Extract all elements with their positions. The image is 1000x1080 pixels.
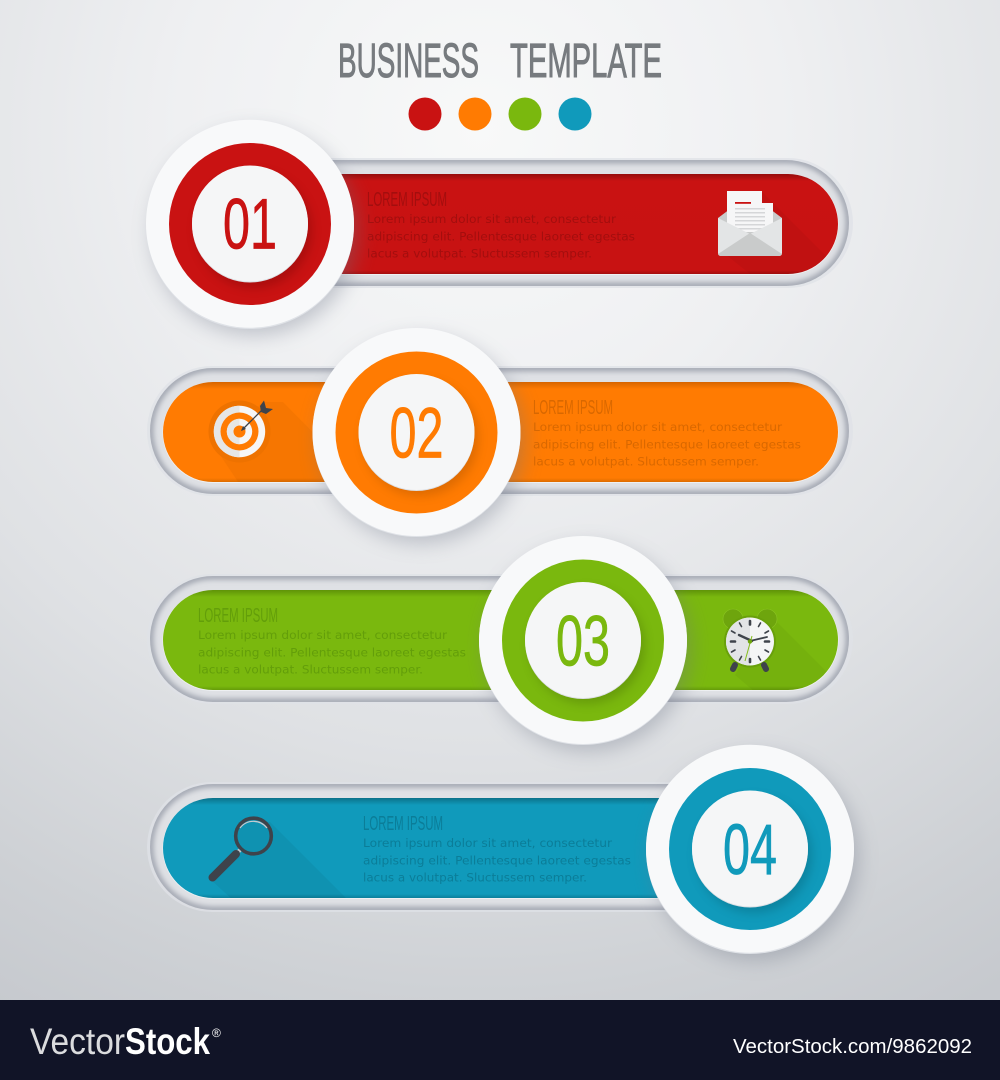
- title: TEMPLATE: [510, 35, 662, 88]
- step 1 text: Lorem ipsum dolor sit amet, consectetur: [367, 212, 616, 226]
- footer logo: [30, 1021, 221, 1062]
- step 2 text: Lorem ipsum dolor sit amet, consectetur: [533, 420, 782, 434]
- step 2 text: [533, 397, 801, 468]
- step 1 text: [367, 189, 635, 260]
- panel: step 1: [146, 120, 860, 335]
- step 4 text: Lorem ipsum dolor sit amet, consectetur: [363, 836, 612, 850]
- step 3 bar: [163, 590, 838, 690]
- panel: step 4: [147, 745, 858, 960]
- step 1 bar: [163, 174, 838, 274]
- title: BUSINESS: [338, 35, 479, 88]
- step 3 text: Lorem ipsum dolor sit amet, consectetur: [198, 628, 447, 642]
- step 2 text: LOREM IPSUM: [533, 397, 613, 419]
- icon: target with arrow: [208, 400, 273, 462]
- footer logo: Stock: [125, 1021, 210, 1062]
- step 2 text: lacus a volutpat. Sluctussem semper.: [533, 454, 759, 468]
- step 4 text: adipiscing elit. Pellentesque laoreet egestas: [363, 854, 631, 868]
- step 1 text: adipiscing elit. Pellentesque laoreet egestas: [367, 230, 635, 244]
- step 4 text: LOREM IPSUM: [363, 813, 443, 835]
- footer band: [0, 1000, 1000, 1080]
- step 3 badge: 03: [556, 602, 610, 682]
- step 1 badge: 01: [223, 186, 277, 264]
- panel: step 3: [147, 536, 860, 751]
- step 2 badge: 02: [390, 394, 444, 474]
- icon: magnifying glass: [212, 818, 271, 878]
- footer logo: Vector: [30, 1021, 125, 1062]
- step 2 badge: [312, 328, 524, 543]
- step 2 bar: [163, 382, 838, 482]
- icon: alarm clock: [723, 609, 777, 669]
- step 4 badge: 04: [723, 811, 777, 890]
- step 4 bar: [163, 798, 838, 898]
- icon: magnifier long shadow: [213, 822, 345, 898]
- step 4 text: lacus a volutpat. Sluctussem semper.: [363, 870, 587, 884]
- icon: envelope long shadow: [720, 192, 860, 290]
- colour dots: [408, 98, 592, 130]
- step 3 text: lacus a volutpat. Sluctussem semper.: [198, 662, 423, 676]
- icon: target long shadow: [222, 402, 320, 482]
- step 3 badge: [479, 536, 691, 751]
- panel: step 2: [147, 328, 853, 543]
- step 1 text: LOREM IPSUM: [367, 189, 447, 211]
- icon: envelope with letter: [718, 191, 782, 256]
- step 3 text: LOREM IPSUM: [198, 605, 278, 627]
- step 1 badge: [146, 120, 358, 335]
- step 3 text: [198, 605, 466, 676]
- footer logo: ®: [212, 1026, 221, 1040]
- step 3 text: adipiscing elit. Pellentesque laoreet egestas: [198, 646, 466, 660]
- step 1 text: lacus a volutpat. Sluctussem semper.: [367, 246, 592, 260]
- footer image id: VectorStock.com/9862092: [733, 1036, 972, 1058]
- step 2 text: adipiscing elit. Pellentesque laoreet egestas: [533, 438, 801, 452]
- step 4 text: [363, 813, 631, 884]
- icon: clock long shadow: [735, 615, 860, 705]
- step 4 badge: [646, 745, 858, 960]
